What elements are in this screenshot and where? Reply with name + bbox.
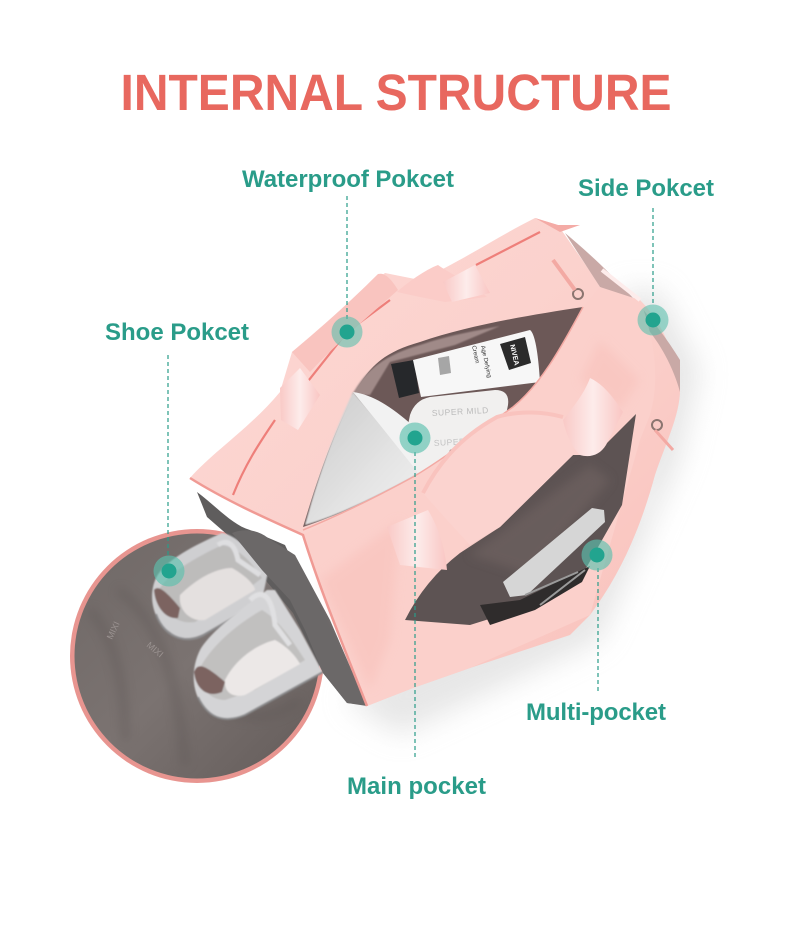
white tube: Nivea cream: Age Defying [479, 345, 492, 378]
label: Waterproof Pokcet: Waterproof Pokcet [242, 166, 454, 193]
dark seam on the far side of bag [565, 233, 680, 392]
shoe compartment lid: MIXI [145, 640, 165, 659]
silver case and sunglasses [480, 508, 605, 625]
handle: upper left padded strap [280, 265, 490, 430]
label: Main pocket: Main pocket [347, 773, 486, 800]
white tube: Nivea cream [391, 330, 540, 398]
main opening piping [303, 307, 583, 530]
marker: side pocket [638, 304, 668, 336]
white tube: Nivea cream: Cream [470, 345, 480, 364]
illustration: open gym bag [70, 218, 700, 783]
white box: Super Mild: SUPER MILD [434, 435, 491, 448]
white box: Super Mild: SUPER MILD [432, 405, 489, 418]
upper zipper seam [305, 232, 540, 385]
title: INTERNAL STRUCTURE [120, 64, 672, 121]
zipper pulls and trim [190, 218, 673, 706]
side pocket opening with grey lining [405, 414, 636, 625]
marker: shoe pocket [154, 556, 184, 586]
shoe compartment lid [70, 529, 324, 783]
white box: Super Mild [405, 390, 508, 475]
bag body [190, 218, 680, 706]
label: Side Pokcet: Side Pokcet [578, 175, 714, 202]
shoe compartment lid: MIXI [105, 620, 122, 641]
front panel [303, 287, 655, 706]
handle: front strap folded over panel [387, 378, 623, 570]
marker: main pocket [400, 422, 430, 454]
label: Shoe Pokcet: Shoe Pokcet [105, 319, 249, 346]
sneaker: upper [152, 533, 268, 639]
sneaker: lower [194, 590, 323, 719]
white tube: Nivea cream: NIVEA [508, 344, 520, 366]
label: Multi-pocket: Multi-pocket [526, 699, 666, 726]
grey T-shirt [305, 392, 425, 525]
main compartment interior [303, 307, 583, 527]
marker: waterproof pocket [332, 316, 362, 348]
front panel shading [320, 340, 640, 690]
grey shoe liner fabric behind shoes [197, 492, 365, 705]
left panel zipper [233, 420, 275, 495]
grey fabric over shoes [232, 530, 367, 706]
label: Side Pokcet [578, 175, 714, 306]
marker: multi-pocket [582, 540, 612, 570]
